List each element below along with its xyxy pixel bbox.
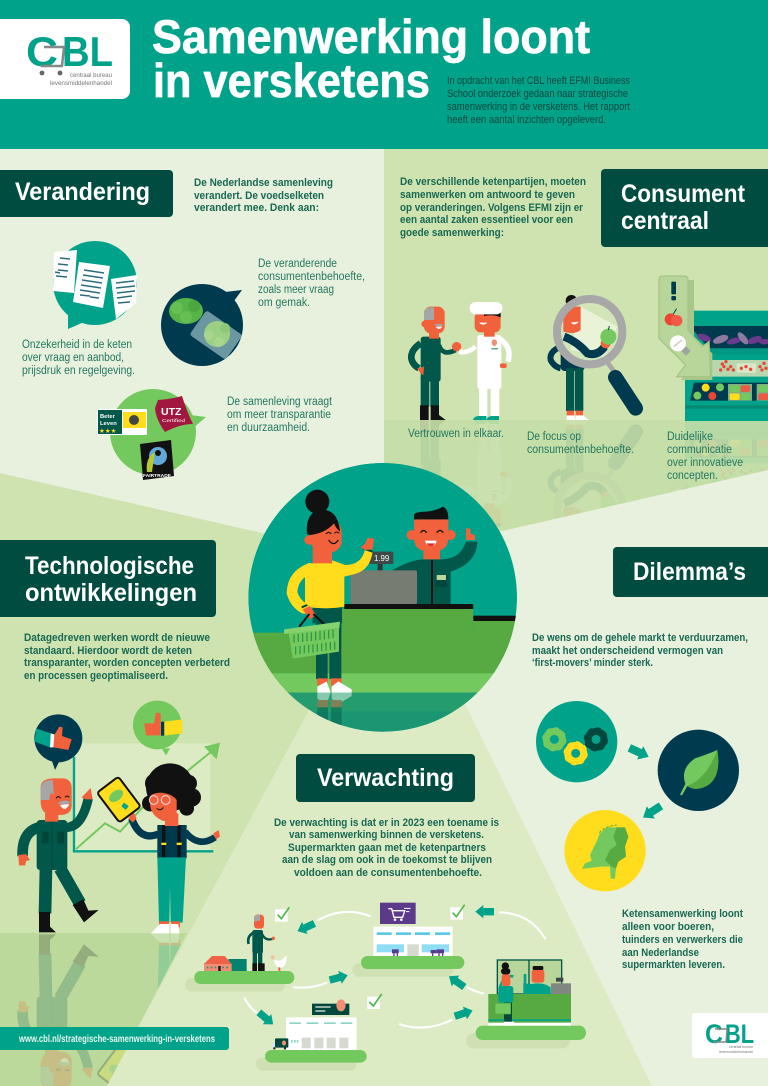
cycle arrows [255,905,494,1029]
title: in versketens [153,54,430,107]
text: Technologie intro: transparanter, worden concepten verbeterd [24,657,230,669]
logo: small CBL [692,1013,768,1058]
text: Ketensamenwerking note: Ketensamenwerking loont [622,908,743,920]
text: Technologie intro: Datagedreven werken wordt de nieuwe [24,632,210,644]
text: Consument centraal intro: op veranderingen. Volgens EFMI zijn er [400,202,584,214]
text: Verwachting intro: Supermarkten gaan met de ketenpartners [288,842,486,854]
heading: Verandering: Verandering [15,178,150,206]
text: Vertrouwen caption: Vertrouwen in elkaar. [408,428,504,440]
text: Onzekerheid caption: Onzekerheid in de keten [22,339,132,351]
text: Ketensamenwerking note: alleen voor boeren, [622,921,714,933]
text: Communicatie caption: Duidelijke [667,431,713,443]
icon: quality labels bubble: FAIRTRADE [143,473,172,479]
logo: small CBL: BL [725,1019,754,1049]
text: Consument centraal intro [400,176,586,239]
icon: quality labels bubble: UTZ [161,406,182,418]
text: Dilemma intro: ‘first-movers’ minder sterk. [532,657,653,669]
text: Communicatie caption: communicatie [667,444,732,456]
intro text: In opdracht van het CBL heeft EFMI Business [447,75,630,87]
text: Dilemma intro [532,632,748,669]
cashier [393,507,477,604]
text: Verandering intro: verandert. De voedselketen [194,190,324,202]
text: Consumentenbehoefte caption: om gemak. [258,297,310,309]
text: Technologie intro: en processen geoptimaliseerd. [24,670,168,682]
text: Verwachting intro: van samenwerking binnen de versketens. [289,829,484,841]
illustration: magnifying glass and consumer [550,295,636,420]
logo: CBL: centraal bureau [70,72,112,79]
text: Transparantie caption [227,396,333,434]
text: Consument centraal intro: samenwerken om antwoord te geven [400,189,575,201]
arrow: gears to leaf [626,741,652,763]
text: Consumentenbehoefte caption [258,258,365,309]
processing plant [265,994,382,1063]
text: Consument centraal intro: een aantal zaken essentieel voor een [400,214,573,226]
farm [194,907,294,984]
logo: small CBL: levensmiddelenhandel [719,1050,753,1054]
icon: thumbs-up bubble green [133,701,182,755]
text: Onzekerheid caption: prijsdruk en regelgeving. [22,365,135,377]
intro text: heeft een aantal inzichten opgeleverd. [447,114,606,126]
arrow: leaf to map [639,800,665,824]
text: Ketensamenwerking note: supermarkten leveren. [622,959,725,971]
reflections on the shop floor [420,420,768,527]
shopper reflection [317,692,352,726]
reflections on the floor [17,934,182,1086]
heading: Dilemma's [613,547,768,597]
text: Verandering intro: verandert mee. Denk aan: [194,202,319,214]
icon: leaf [658,730,739,811]
heading: Technologische ontwikkelingen: Technologische [25,552,194,580]
illustration: man with high five [18,778,99,932]
illustration: supply chain cycle [185,903,586,1071]
header band [0,0,768,149]
heading: Technologische ontwikkelingen: ontwikkelingen [25,579,197,607]
illustration: handshake farmer and chef [411,302,509,420]
text: Ketensamenwerking note [622,908,743,971]
cash register [350,552,417,604]
icon: quality labels bubble: Certified [162,418,185,424]
text: Consumentenbehoefte caption: De veranderende [258,258,337,270]
intro text: School onderzoek gedaan naar strategische [447,88,628,100]
illustration: woman with tablet [97,763,220,933]
text: Onzekerheid caption: over vraag en aanbod, [22,352,124,364]
heading: Verwachting: Verwachting [317,764,454,792]
icon: quality labels bubble: Leven [100,421,117,427]
illustration: supermarket shelf with sign arrow [659,276,768,421]
text: Dilemma intro: maakt het onderscheidend vermogen van [532,645,723,657]
icon: gears [536,701,617,782]
icon: documents bubble [53,241,137,329]
icon: quality labels bubble [97,389,206,480]
platform shadows [185,963,570,1071]
link bar: www.cbl.nl/strategische-samenwerking-in-versketens [18,1033,215,1045]
heading: Verwachting [296,754,475,802]
text: Verwachting intro: De verwachting is dat er in 2023 een toename is [274,817,499,829]
text: Technologie intro [24,632,230,682]
text: Consument centraal intro: goede samenwerking: [400,227,504,239]
icon: Netherlands map [564,810,646,891]
panel: Consument centraal [400,169,768,564]
icon: quality labels bubble: ★★★ [99,427,117,435]
text: Technologie intro: standaard. Hierdoor wordt de keten [24,645,192,657]
logo: CBL: C [26,28,58,75]
text: Verandering intro: De Nederlandse samenleving [194,177,333,189]
link bar [0,1027,229,1050]
text: Verwachting intro [274,817,499,879]
icon: thumbs-up bubble navy [34,714,82,770]
logo: small CBL: centraal bureau [729,1045,753,1049]
intro text: samenwerking in de versketens. Het rapport [447,101,630,113]
logo: small CBL: C [705,1019,723,1049]
text: Focus caption [527,431,634,456]
floor and counter [243,604,520,735]
text: Ketensamenwerking note: aan Nederlandse [622,947,699,959]
logo: CBL: levensmiddelenhandel [50,80,112,87]
title: Samenwerking loont [152,10,590,63]
shopper [284,490,374,731]
text: Communicatie caption: over innovatieve [667,457,743,469]
text: Ketensamenwerking note: tuinders en verwerkers die [622,934,743,946]
icon: quality labels bubble: Beter [100,414,116,420]
panel: Technologische ontwikkelingen [0,540,230,1086]
heading: Technologische ontwikkelingen [0,540,216,617]
panel: Dilemma's [532,547,768,1058]
circle backdrop [248,463,517,732]
text: Communicatie caption [667,431,743,482]
cash register: 1.99 [374,554,390,563]
supermarket building [361,903,465,969]
icon: vegetables bubble [161,284,243,366]
text: Transparantie caption: De samenleving vraagt [227,396,333,408]
text: Focus caption: consumentenbehoefte. [527,444,634,456]
illustration: central checkout scene [243,463,520,735]
heading: Consument centraal [601,169,768,247]
heading: Consument centraal: centraal [621,207,709,235]
text: Verandering intro [194,177,333,214]
text: Focus caption: De focus op [527,431,581,443]
heading: Verandering [0,170,173,217]
text: Consument centraal intro: De verschillende ketenpartijen, moeten [400,176,586,188]
panel: Verwachting [185,754,586,1071]
chart: growth line graph [74,743,220,851]
logo: CBL [0,19,130,99]
text: Consumentenbehoefte caption: zoals meer vraag [258,284,334,296]
text: Verwachting intro: aan de slag om ook in de toekomst te blijven [282,854,492,866]
heading: Consument centraal: Consument [621,180,746,208]
intro text [447,75,630,126]
text: Communicatie caption: concepten. [667,470,718,482]
text: Onzekerheid caption [22,339,135,377]
panel: Verandering [0,170,365,480]
text: Transparantie caption: om meer transparantie [227,409,331,421]
text: Verwachting intro: voldoen aan de consumentenbehoefte. [294,867,482,879]
text: Transparantie caption: en duurzaamheid. [227,422,310,434]
title [152,10,590,107]
heading: Dilemma's: Dilemma’s [633,558,746,586]
text: Consumentenbehoefte caption: consumentenbehoefte, [258,271,365,283]
cycle arcs [245,912,545,1028]
shop counter [476,960,586,1040]
logo: CBL: BL [62,28,113,75]
